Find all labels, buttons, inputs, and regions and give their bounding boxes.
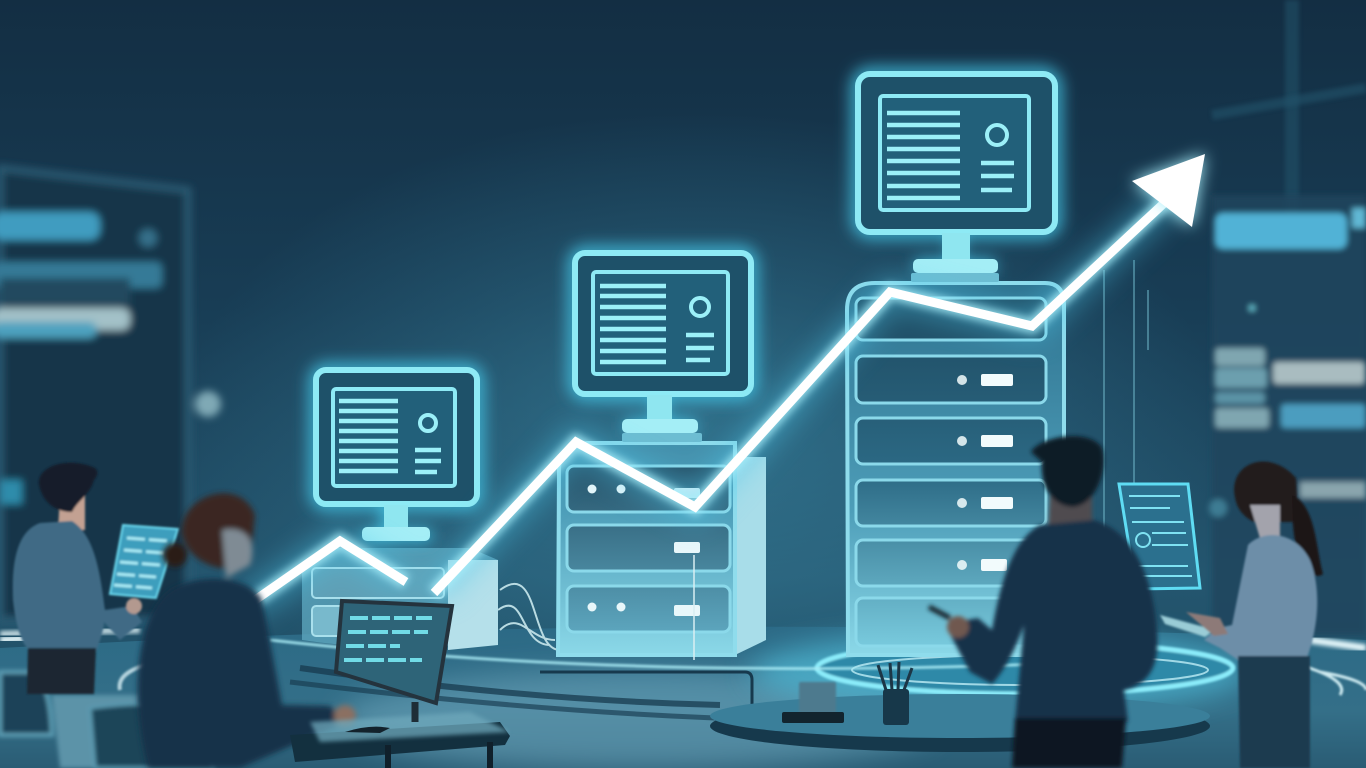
medium server: [558, 443, 766, 660]
floating document right: [1119, 484, 1200, 589]
floating document left: [110, 525, 178, 598]
small server: [302, 548, 560, 650]
floor and platform: [0, 627, 1366, 768]
person: man in foreground: [929, 436, 1158, 768]
office chairs and side table: [0, 672, 214, 768]
blurred right wall display: [1209, 195, 1366, 635]
laptop on desk: [290, 601, 510, 768]
large server: [847, 260, 1148, 655]
blurred left wall display: [0, 168, 221, 620]
person: man at left: [13, 463, 142, 694]
round desk with pen holder: [710, 662, 1210, 752]
person: seated woman: [138, 493, 356, 768]
monitor: small: [316, 370, 477, 541]
monitor: large: [858, 74, 1055, 282]
person: woman with tablet: [1160, 461, 1323, 768]
arrow: growth trend line: [248, 154, 1205, 605]
monitor: medium: [575, 253, 751, 442]
